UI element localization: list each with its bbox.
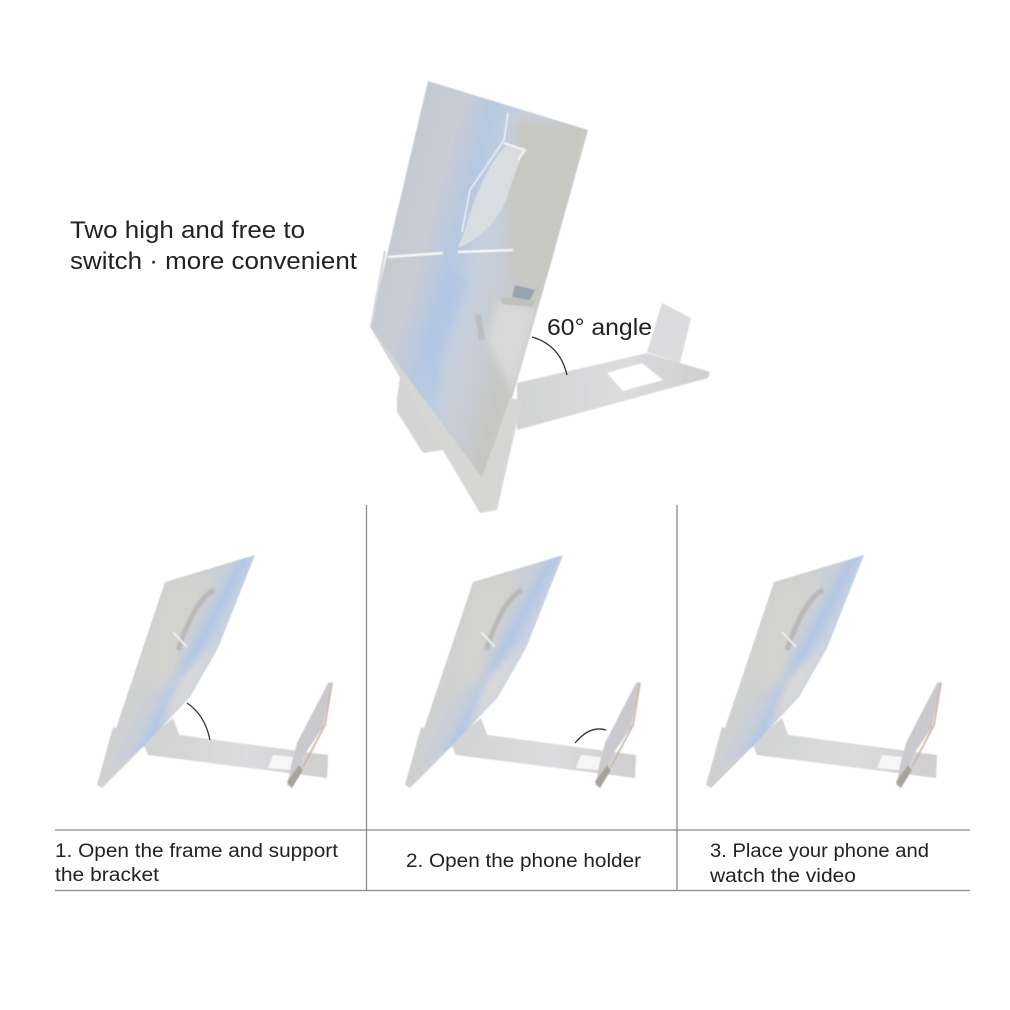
heading: two high and free to switch: Two high and free to	[70, 217, 305, 244]
step 2 image	[405, 555, 640, 788]
heading: two high and free to switch	[70, 217, 357, 275]
step 1 image	[97, 555, 332, 788]
caption: step 3: watch the video	[709, 866, 856, 887]
front frame	[370, 327, 522, 513]
caption: step 2: 2. Open the phone holder	[406, 851, 642, 872]
magnifier screen	[370, 81, 588, 478]
phone holder	[647, 303, 691, 363]
caption: step 1: the bracket	[55, 865, 160, 886]
phone slot	[607, 363, 663, 391]
label: 60 degree angle: 60° angle	[547, 314, 652, 340]
back support	[397, 377, 443, 453]
step 3 image	[706, 555, 941, 788]
main product image: magnifier on 60 degree stand	[370, 81, 710, 513]
side frame top	[370, 250, 386, 326]
caption: step 1	[55, 841, 339, 886]
caption: step 1: 1. Open the frame and support	[55, 841, 339, 862]
angle arc	[532, 337, 567, 375]
heading: two high and free to switch: switch · more convenient	[70, 248, 357, 275]
caption: step 3	[709, 841, 929, 887]
base bar	[517, 353, 710, 430]
caption: step 3: 3. Place your phone and	[710, 841, 929, 862]
